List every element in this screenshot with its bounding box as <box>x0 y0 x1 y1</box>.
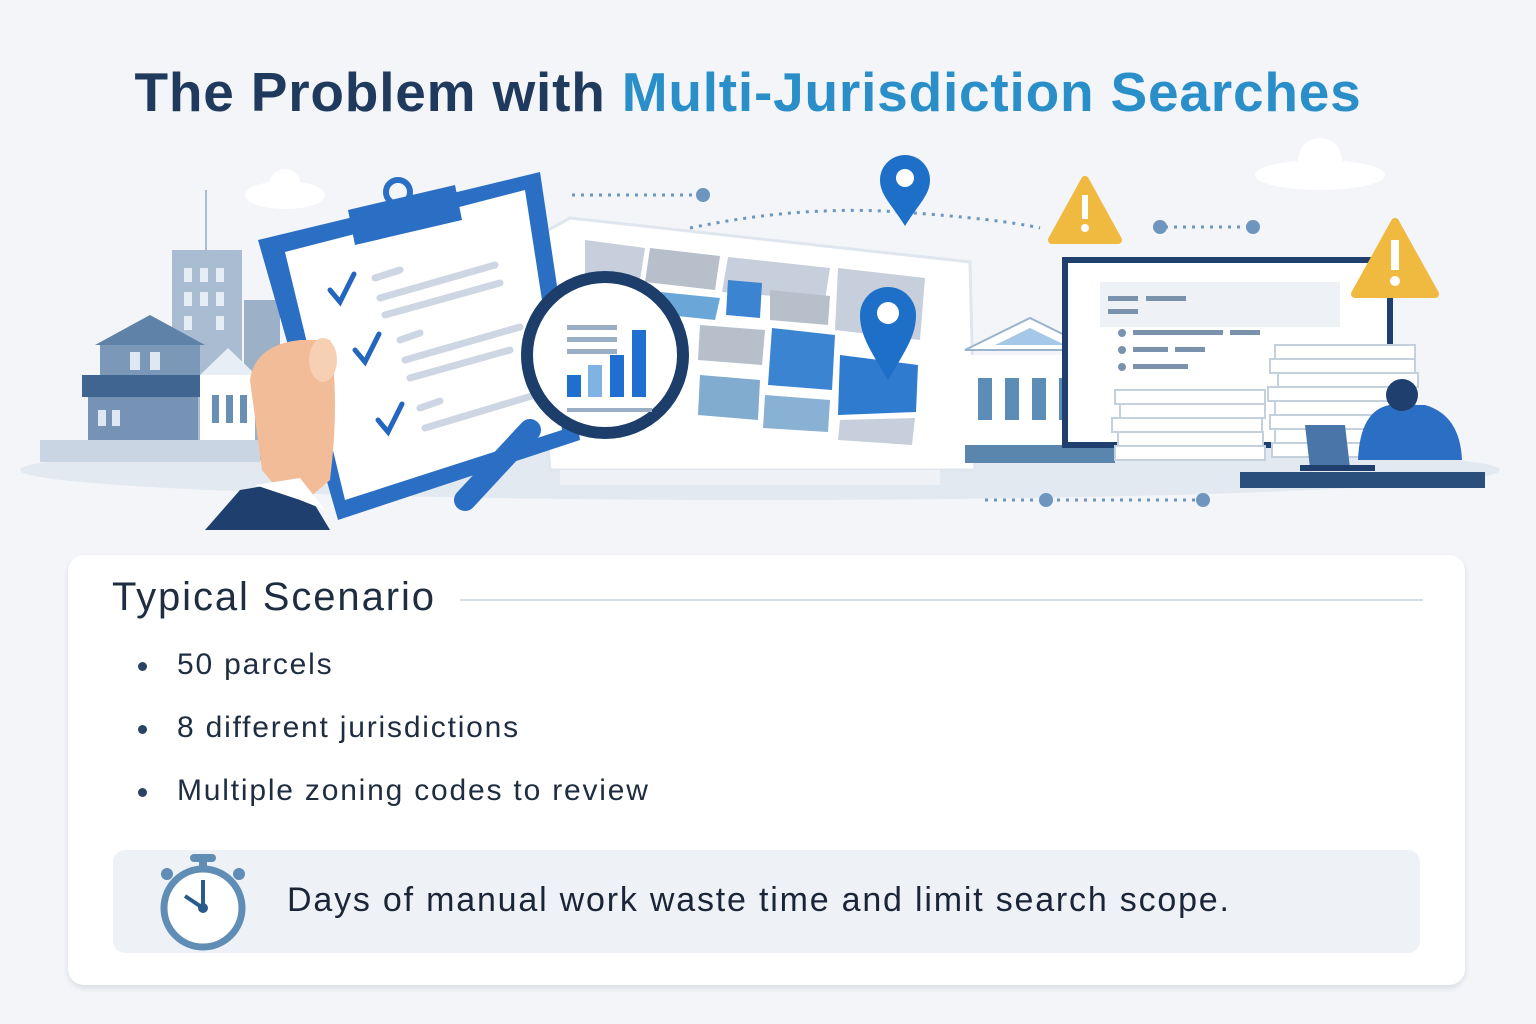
bullet list: Multiple zoning codes to review <box>177 774 650 807</box>
clipboard <box>258 172 580 520</box>
stressed person <box>1240 379 1485 488</box>
title: The Problem with Multi-Jurisdiction Searches <box>134 61 1362 123</box>
hand <box>205 338 337 530</box>
bullet list <box>138 648 650 807</box>
top pin <box>880 155 930 226</box>
bullet list: 8 different jurisdictions <box>177 711 520 744</box>
callout <box>113 850 1420 953</box>
map <box>530 218 975 485</box>
monitor <box>1065 260 1390 445</box>
dotted connectors <box>572 195 1250 500</box>
icon: stopwatch <box>160 854 246 950</box>
bullet list: 50 parcels <box>177 648 333 681</box>
courthouse <box>965 318 1115 463</box>
heading: Typical Scenario <box>112 575 436 619</box>
illustration <box>20 138 1500 530</box>
ground shadow <box>20 440 1500 500</box>
warning icons <box>1052 180 1118 240</box>
magnifier <box>465 277 683 500</box>
clouds <box>245 138 1385 209</box>
callout text: Days of manual work waste time and limit search scope. <box>287 881 1231 919</box>
pin on map <box>860 287 916 380</box>
panel: typical scenario <box>68 555 1465 985</box>
city buildings left <box>40 190 280 462</box>
paper stacks <box>1112 345 1418 460</box>
